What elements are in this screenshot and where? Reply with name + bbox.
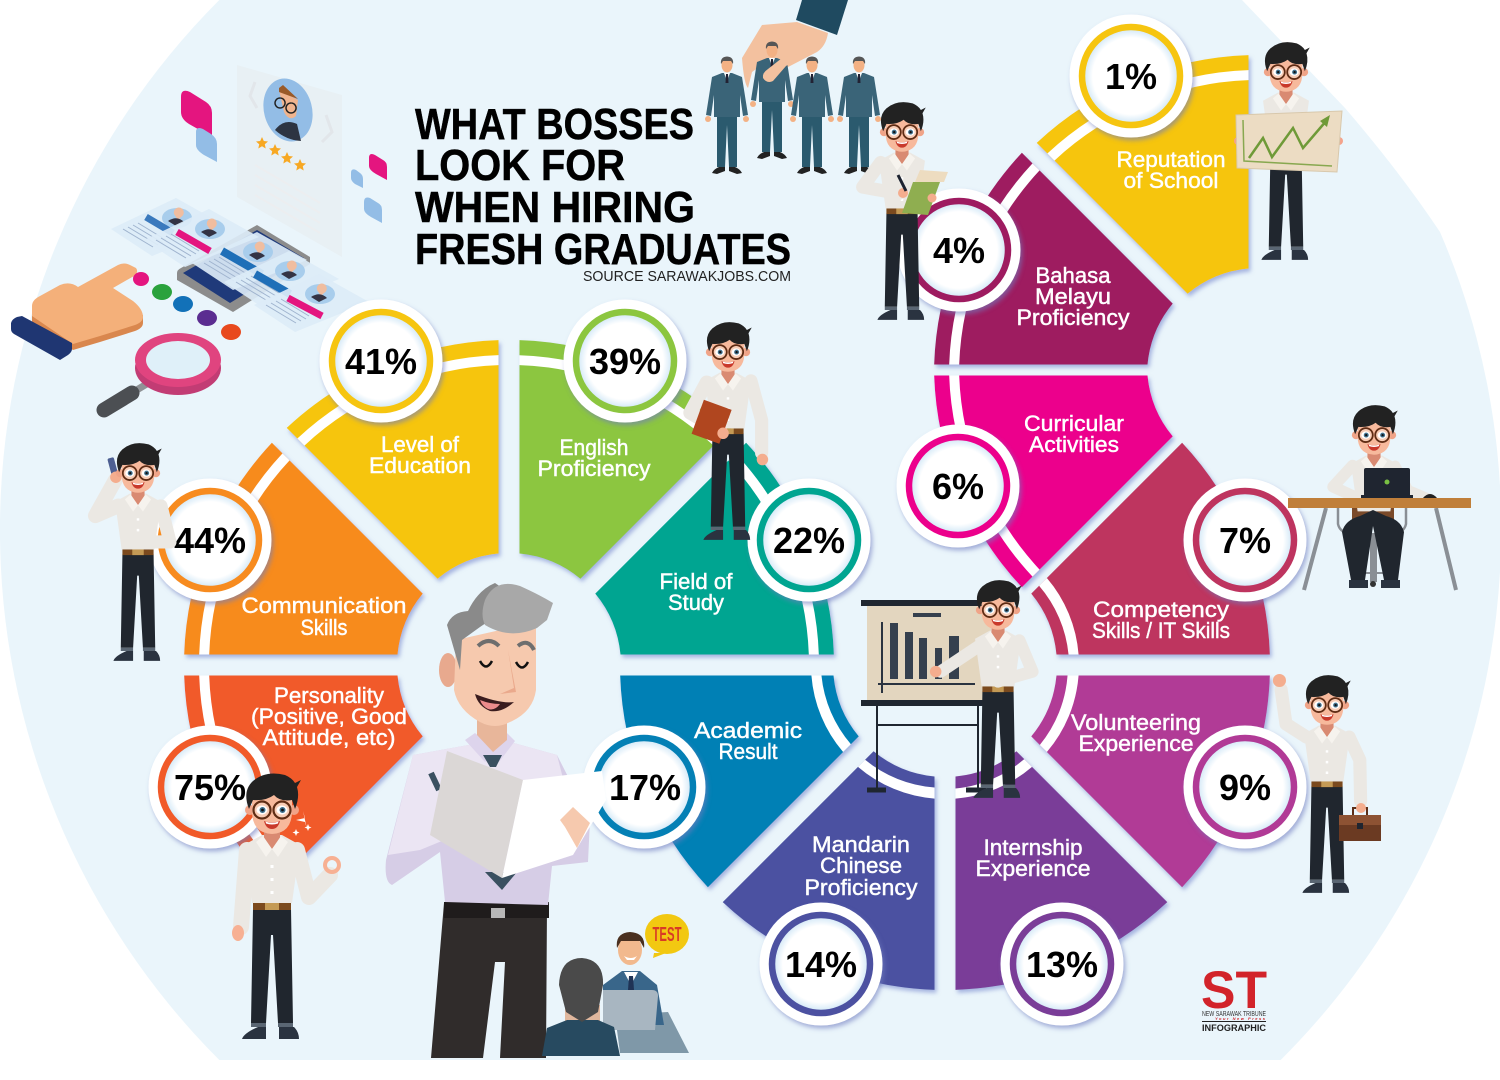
character: graduate holding growth chart	[1234, 42, 1343, 260]
sector: Mandarin Chinese Proficiency	[723, 733, 1041, 1052]
boss neck and head	[439, 583, 553, 752]
briefcase	[1339, 803, 1381, 841]
logo: ST New Sarawak Tribune Infographic: NEW SARAWAK TRIBUNE	[1202, 1011, 1266, 1018]
badge: 4%	[898, 188, 1020, 312]
laptop	[603, 990, 658, 1030]
label: Communication Skills	[242, 593, 406, 640]
colored buttons	[133, 272, 241, 340]
label: Competency Skills / IT Skills	[1092, 597, 1230, 643]
label: Reputation of School	[1116, 147, 1226, 193]
label: Level of Education	[369, 432, 471, 478]
label: Bahasa Melayu Proficiency: Proficiency	[1016, 305, 1130, 330]
label: Reputation of School: of School	[1124, 168, 1218, 193]
label: Communication Skills: Skills	[300, 615, 348, 640]
label: Level of Education: Level of	[381, 432, 460, 457]
source line: SOURCE SARAWAKJOBS.COM	[583, 269, 791, 285]
badge: 6%: 6%	[932, 466, 984, 507]
label: Curricular Activities: Curricular	[1024, 411, 1124, 436]
label: Mandarin Chinese Proficiency	[804, 832, 918, 900]
badge: 9%: 9%	[1219, 767, 1271, 808]
label: Field of Study: Field of	[660, 569, 733, 594]
laptop	[1361, 468, 1437, 498]
badge: 44%	[148, 478, 272, 602]
badge: 7%: 7%	[1219, 520, 1271, 561]
badge: 44%: 44%	[174, 520, 246, 561]
title	[415, 101, 791, 274]
sector: Personality	[184, 676, 423, 887]
illustration: hand picking a candidate	[705, 0, 881, 174]
label: Reputation of School: Reputation	[1116, 147, 1226, 172]
badge: 22%	[748, 478, 870, 602]
label: Internship Experience: Internship	[984, 835, 1082, 860]
boss hand	[560, 807, 590, 848]
percentage badges	[148, 14, 1306, 1026]
clipboard	[898, 170, 948, 215]
speech bubble	[645, 914, 689, 958]
badge: 17%: 17%	[609, 767, 681, 808]
label: Academic Result: Academic	[694, 718, 802, 743]
badge: 1%	[1070, 14, 1192, 138]
title: WHAT BOSSES	[415, 101, 694, 149]
label: Personality: Personality	[274, 683, 384, 708]
badge: 14%: 14%	[785, 944, 857, 985]
magnifying glass	[104, 333, 221, 410]
table	[615, 1012, 689, 1053]
character: boss reading document	[386, 583, 606, 1058]
label: Personality: Attitude, etc)	[262, 725, 396, 750]
badge: 9%	[1184, 726, 1306, 848]
boss shirt	[386, 742, 590, 905]
illustration: job interview with test bubble	[542, 914, 689, 1056]
label: Curricular Activities: Activities	[1029, 432, 1119, 457]
label: Field of Study: Study	[668, 590, 724, 615]
label: Competency Skills / IT Skills: Competency	[1093, 597, 1229, 622]
desk	[1288, 498, 1471, 590]
boss open document	[430, 751, 606, 878]
label: Competency Skills / IT Skills: Skills / IT Skills	[1092, 618, 1230, 643]
character: graduate on the phone	[95, 443, 170, 661]
character: waving graduate with briefcase	[1273, 674, 1381, 893]
badge: 1%: 1%	[1105, 56, 1157, 97]
badge: 4%: 4%	[933, 230, 985, 271]
badge: 13%	[1000, 902, 1124, 1026]
badge: 41%	[320, 300, 442, 422]
title: WHEN HIRING	[415, 184, 695, 232]
badge: 75%	[148, 726, 272, 848]
label: Personality: (Positive, Good	[251, 704, 407, 729]
label: Bahasa Melayu Proficiency: Melayu	[1035, 284, 1111, 309]
badge: 41%: 41%	[345, 341, 417, 382]
label: Bahasa Melayu Proficiency	[1016, 263, 1130, 330]
logo: ST New Sarawak Tribune Infographic: INFOGRAPHIC	[1202, 1023, 1266, 1034]
sectors	[122, 55, 1332, 1052]
decorative tiles	[181, 91, 387, 223]
character: presenter with bar chart board	[861, 580, 1032, 798]
sector: Academic Result	[620, 676, 859, 887]
resume cards	[111, 198, 369, 332]
badge: 22%: 22%	[773, 520, 845, 561]
boss trousers	[431, 903, 547, 1058]
label: Personality	[251, 683, 407, 750]
sector: Level of Education	[287, 340, 498, 579]
label: Mandarin Chinese Proficiency: Proficiency	[804, 875, 918, 900]
sector: Volunteering Experience	[1013, 569, 1332, 887]
logo: ST New Sarawak Tribune Infographic: ST	[1201, 961, 1267, 1020]
character: graduate with clipboard	[863, 102, 948, 320]
label: Mandarin Chinese Proficiency: Mandarin	[812, 832, 910, 857]
character: graduate at laptop desk	[1288, 405, 1471, 590]
title: LOOK FOR	[415, 142, 625, 190]
growth chart board	[1234, 111, 1343, 172]
badge: 6%	[896, 424, 1020, 548]
label: Internship Experience: Experience	[976, 856, 1090, 881]
label: Field of Study	[660, 569, 733, 615]
label: Volunteering Experience	[1071, 710, 1201, 756]
label: English Proficiency	[538, 435, 650, 481]
label: English Proficiency: Proficiency	[538, 456, 650, 481]
interviewer	[603, 932, 664, 1025]
badge: 39%	[564, 300, 686, 422]
seated legs	[1342, 510, 1404, 580]
label: Curricular Activities	[1024, 411, 1124, 457]
badge: 75%: 75%	[174, 767, 246, 808]
title: FRESH GRADUATES	[415, 226, 791, 274]
badge: 17%	[582, 726, 706, 848]
label: English Proficiency: English	[560, 435, 628, 460]
presentation board	[861, 600, 991, 790]
chair	[1338, 506, 1406, 587]
label: Volunteering Experience: Experience	[1078, 731, 1194, 756]
sector: Reputation of School	[1037, 55, 1248, 294]
sector: Curricular Activities	[934, 376, 1173, 587]
label: Academic Result: Result	[718, 739, 778, 764]
speech bubble: TEST	[652, 924, 682, 946]
character: graduate with red folder	[690, 322, 768, 540]
pointing hand	[11, 264, 143, 360]
character: smiling graduate with OK gesture	[232, 773, 339, 1039]
badge: 13%: 13%	[1026, 944, 1098, 985]
sector labels	[242, 147, 1230, 900]
boss collar and tie	[465, 733, 517, 890]
sector: Field of Study	[595, 443, 834, 654]
logo: ST New Sarawak Tribune Infographic: Your New Press	[1215, 1016, 1266, 1021]
sector: Communication Skills	[122, 443, 441, 761]
label: Academic Result	[694, 718, 802, 764]
faint resume page	[237, 65, 342, 257]
smartphone	[177, 225, 310, 312]
sector: Internship Experience	[956, 751, 1167, 990]
boss belt	[444, 902, 549, 918]
badge: 14%	[760, 902, 882, 1026]
boss pen	[431, 773, 439, 790]
label: Internship Experience	[976, 835, 1090, 881]
illustration: resume review with hand and magnifier	[11, 65, 387, 410]
label: Volunteering Experience: Volunteering	[1071, 710, 1201, 735]
label: Mandarin Chinese Proficiency: Chinese	[820, 853, 902, 878]
badge: 39%: 39%	[589, 341, 661, 382]
candidate seen from behind	[542, 958, 620, 1056]
label: Communication Skills: Communication	[242, 593, 406, 618]
badge: 7%	[1184, 478, 1306, 602]
label: Bahasa Melayu Proficiency: Bahasa	[1036, 263, 1111, 288]
sector: Competency Skills	[1031, 443, 1270, 654]
sparkles	[292, 811, 313, 836]
sector: Bahasa Melayu Proficiency	[872, 153, 1191, 471]
label: Level of Education: Education	[369, 453, 471, 478]
sector: English Proficiency	[413, 278, 731, 597]
